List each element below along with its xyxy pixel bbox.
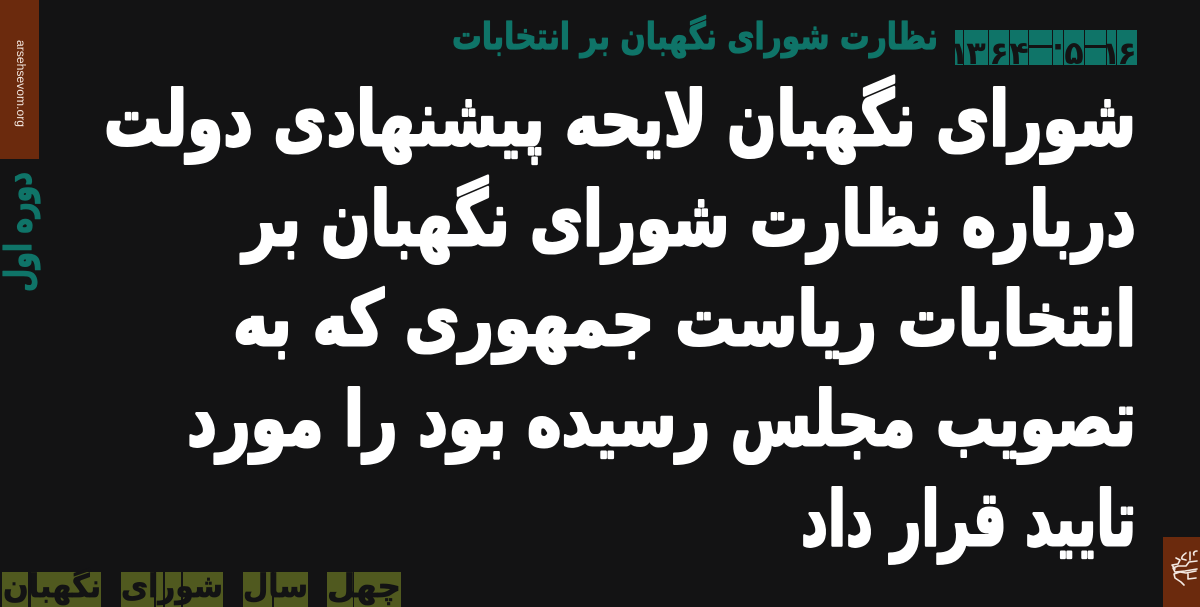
date bar: ۱ <box>1101 34 1121 72</box>
date bar: ۰ <box>1048 26 1068 64</box>
logo badge <box>1163 537 1200 607</box>
series label: چهل <box>327 567 401 605</box>
date bar: ۱ <box>949 34 969 72</box>
date bar <box>949 26 1137 72</box>
main headline <box>104 74 1136 564</box>
date bar: ۶ <box>989 34 1009 72</box>
series label: نگهبان <box>3 567 101 605</box>
date bar: ۵ <box>1064 34 1084 72</box>
series label: شورای <box>121 567 223 605</box>
series label <box>2 567 401 607</box>
date bar: ۶ <box>1117 34 1137 72</box>
subtitle: نظارت شورای نگهبان بر انتخابات <box>452 15 938 58</box>
website tab: arsehsevom.org <box>14 40 26 127</box>
date bar: ۴ <box>1009 34 1029 72</box>
date bar: ۳ <box>966 34 986 72</box>
website tab <box>0 0 39 159</box>
series label: سال <box>243 567 308 605</box>
